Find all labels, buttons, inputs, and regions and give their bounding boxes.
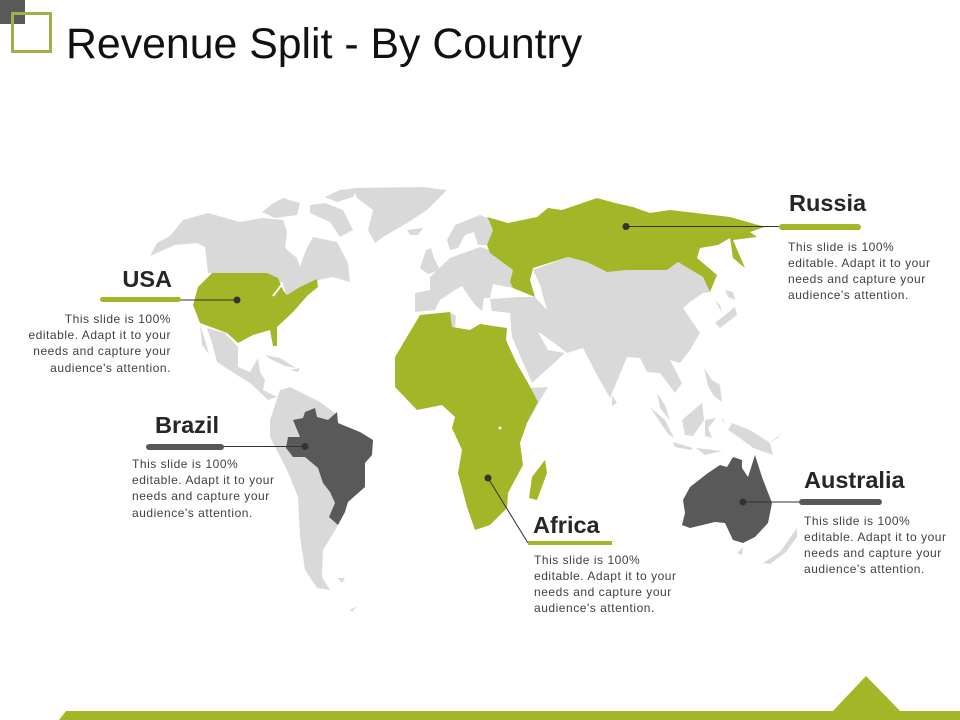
- Madagascar: [529, 460, 547, 500]
- callout: USA: [28, 266, 240, 375]
- callout: Australia: [740, 467, 947, 576]
- callout: USA: needs and capture your: [33, 344, 171, 358]
- callout: Russia: This slide is 100%: [788, 240, 894, 254]
- world map: [150, 187, 797, 612]
- land: grey countries: [150, 187, 797, 612]
- callout: Australia: needs and capture your: [804, 546, 942, 560]
- callout: Australia: This slide is 100%: [804, 514, 910, 528]
- callout: Australia: Australia: [804, 467, 905, 493]
- callout: Brazil: This slide is 100%: [132, 457, 238, 471]
- callout: Australia: editable. Adapt it to your: [804, 530, 947, 544]
- title: Revenue Split - By Country: [66, 20, 583, 68]
- callout: Brazil: [132, 412, 308, 520]
- Australia: [682, 455, 772, 543]
- callout: Brazil: editable. Adapt it to your: [132, 473, 275, 487]
- callout: Russia: editable. Adapt it to your: [788, 256, 931, 270]
- callout: USA: audience's attention.: [50, 361, 171, 375]
- callout: Africa: [484, 474, 677, 615]
- USA: [193, 273, 318, 346]
- callout: Africa: audience's attention.: [534, 601, 655, 615]
- footer band: [59, 676, 960, 720]
- callout: Africa: Africa: [533, 512, 601, 538]
- callout: Brazil: audience's attention.: [132, 506, 253, 520]
- callout: Russia: Russia: [789, 190, 867, 216]
- Russia: [487, 198, 765, 297]
- Lake Victoria: [498, 426, 502, 430]
- callout: USA: editable. Adapt it to your: [28, 328, 171, 342]
- callout: Brazil: Brazil: [155, 412, 219, 438]
- callout: USA: This slide is 100%: [65, 312, 171, 326]
- callout: Australia: audience's attention.: [804, 562, 925, 576]
- Great Lakes: [273, 283, 283, 296]
- callout: Africa: editable. Adapt it to your: [534, 569, 677, 583]
- callout: Russia: audience's attention.: [788, 288, 909, 302]
- callout: Brazil: needs and capture your: [132, 489, 270, 503]
- Africa: [395, 312, 538, 530]
- callout: Russia: [622, 190, 931, 302]
- callout: Russia: needs and capture your: [788, 272, 926, 286]
- Brazil: [286, 408, 373, 525]
- callout: USA: USA: [122, 266, 172, 292]
- title icon: [0, 0, 50, 52]
- callout: Africa: needs and capture your: [534, 585, 672, 599]
- callout: Africa: This slide is 100%: [534, 553, 640, 567]
